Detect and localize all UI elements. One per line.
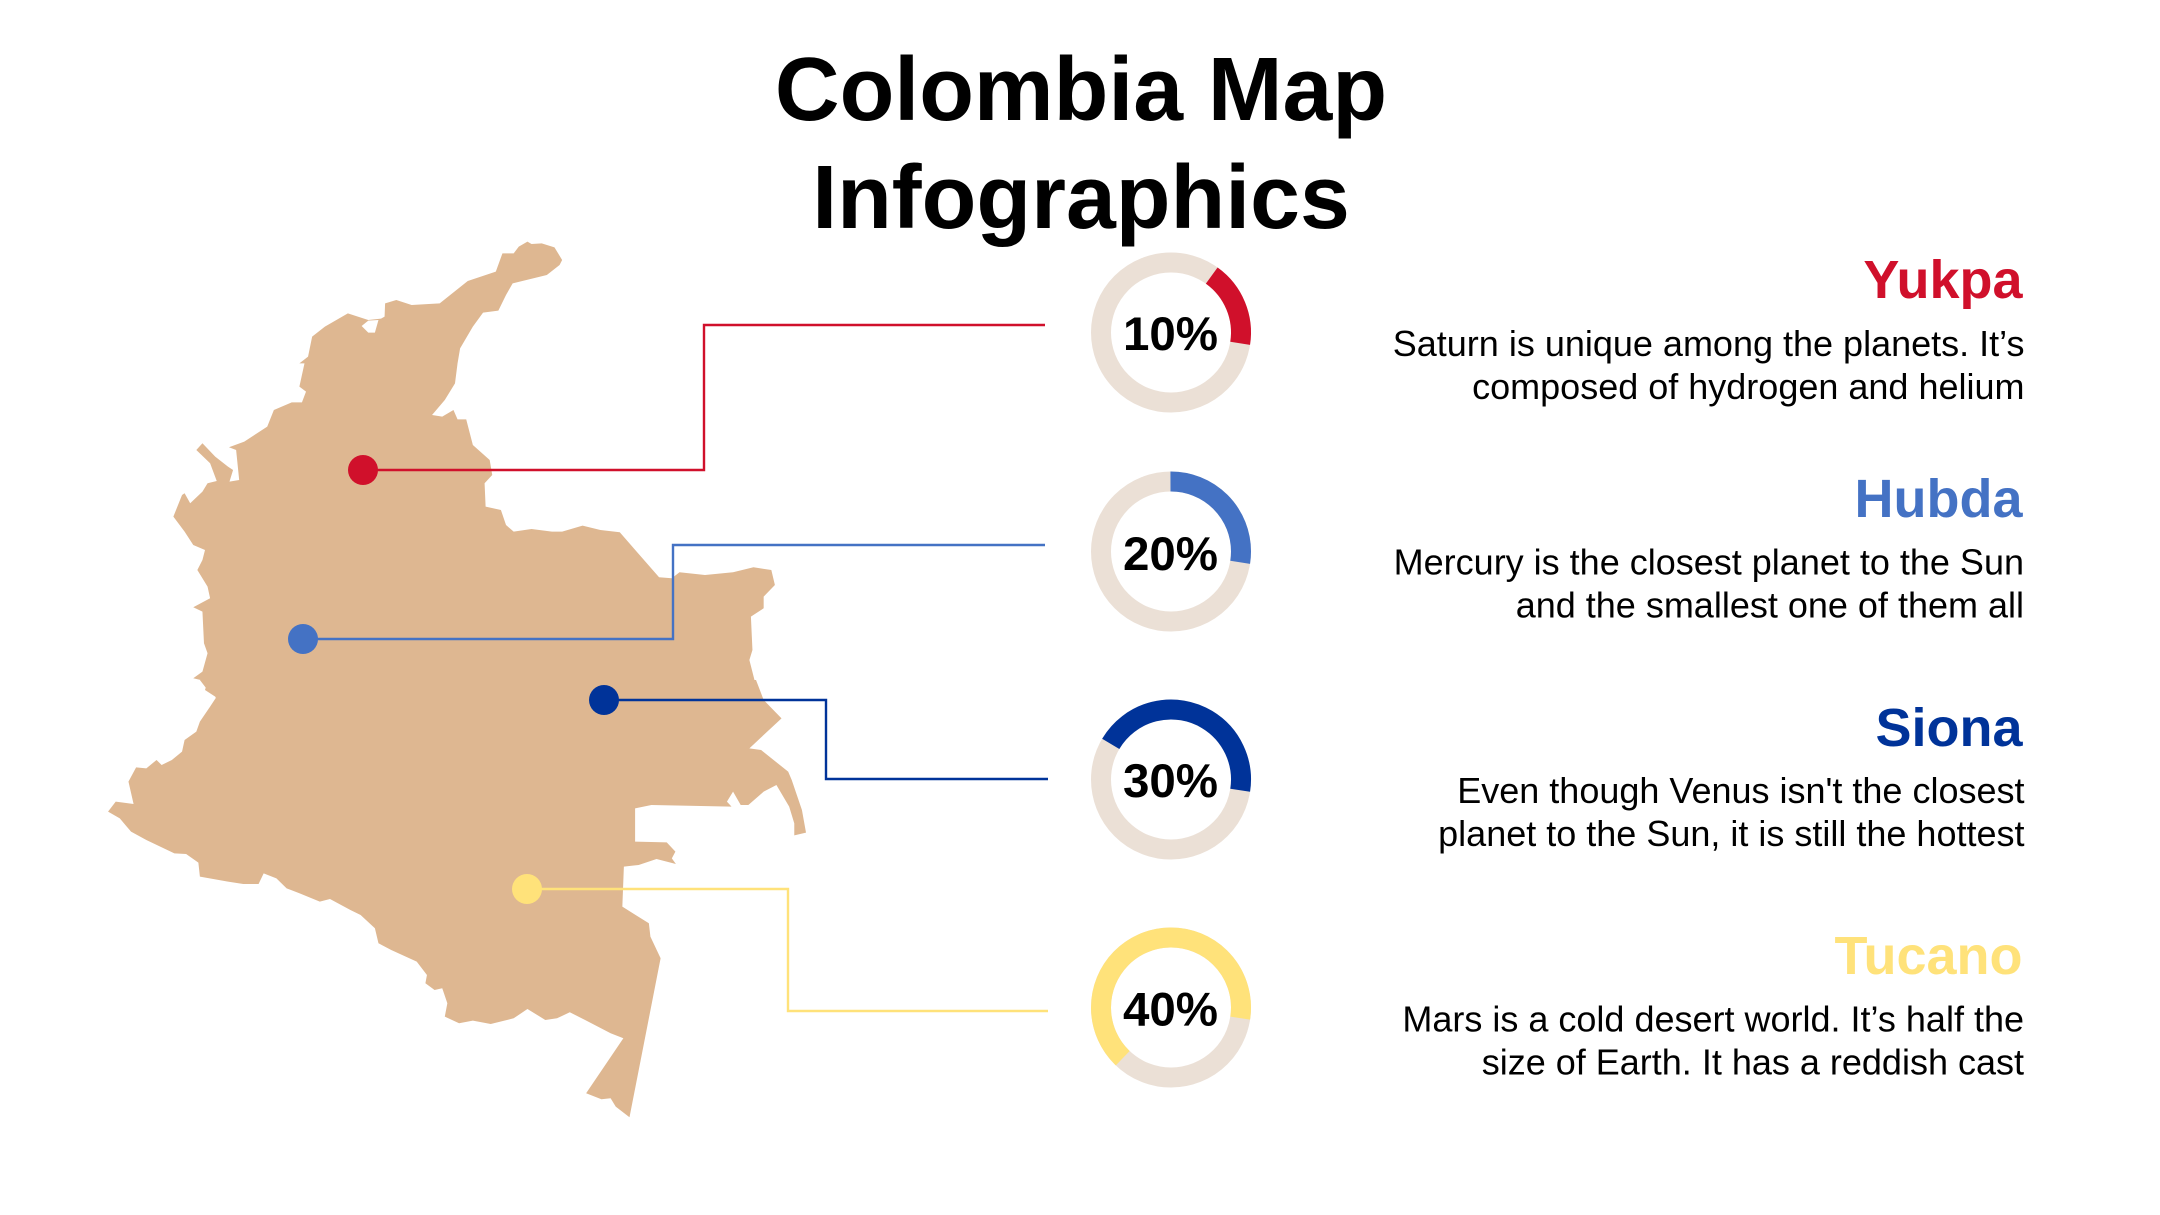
donut chart: 20% <box>1101 482 1241 622</box>
title: Colombia Map <box>775 39 1387 139</box>
text block: Yukpa: Yukpa <box>1863 250 2023 310</box>
connector: Yukpa <box>363 325 1045 470</box>
title: Infographics <box>812 147 1350 247</box>
text block: Hubda: Hubda <box>1854 469 2023 529</box>
donut chart: 20%: 20% <box>1123 528 1218 581</box>
donut chart: 30%: 30% <box>1123 755 1218 808</box>
text block: Siona: planet to the Sun, it is still the hottest <box>1438 813 2024 854</box>
donut chart: 10% <box>1073 235 1269 430</box>
text block: Siona <box>1438 698 2024 854</box>
text block: Siona: Siona <box>1875 698 2023 758</box>
donut chart: 40%: 40% <box>1123 984 1218 1036</box>
donut chart: 40% <box>1072 909 1270 1106</box>
text block: Tucano: size of Earth. It has a reddish cast <box>1482 1042 2024 1082</box>
text block: Hubda <box>1394 469 2024 626</box>
connector: Hubda <box>303 545 1045 639</box>
text block: Tucano <box>1402 926 2024 1082</box>
text block: Yukpa <box>1393 250 2024 407</box>
text block: Tucano: Tucano <box>1834 926 2022 986</box>
map of Colombia <box>108 242 806 1117</box>
title <box>775 39 1387 247</box>
connector: Siona <box>604 700 1048 779</box>
text block: Hubda: Mercury is the closest planet to the Sun <box>1394 542 2024 582</box>
text block: Yukpa: composed of hydrogen and helium <box>1472 366 2024 407</box>
text block: Yukpa: Saturn is unique among the planets. It’s <box>1393 323 2024 364</box>
donut chart: 30% <box>1075 683 1267 876</box>
donut chart: 10%: 10% <box>1123 308 1218 361</box>
text block: Hubda: and the smallest one of them all <box>1516 584 2024 626</box>
map marker: Siona <box>589 685 619 715</box>
map marker: Hubda <box>288 624 318 654</box>
connector: Tucano <box>527 889 1048 1011</box>
map marker: Yukpa <box>348 455 378 485</box>
text block: Tucano: Mars is a cold desert world. It’s half the <box>1402 998 2024 1040</box>
text block: Siona: Even though Venus isn't the closest <box>1457 770 2024 811</box>
map marker: Tucano <box>512 874 542 904</box>
